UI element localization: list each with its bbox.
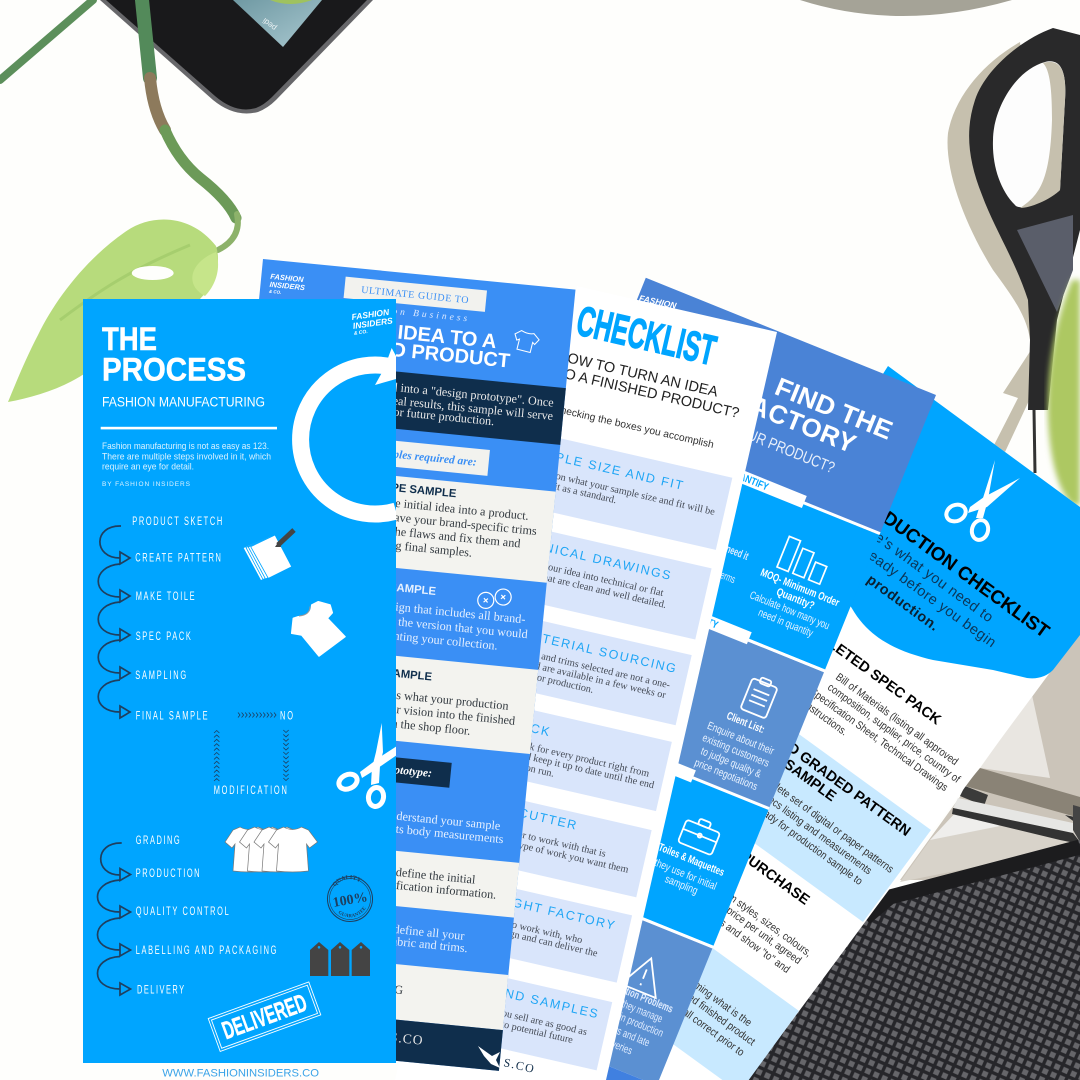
item: right factory (416, 875, 617, 962)
item: tech pack: of production run. (481, 753, 555, 780)
panel: production sample: The sample is what your production (333, 682, 509, 713)
panel: client list: Enquire about their (705, 720, 776, 758)
icon: circular arrow (301, 348, 396, 514)
photo: dark mesh bag (748, 840, 1080, 1080)
item: material sourcing: for production. (533, 672, 595, 696)
item: pattern cutter: experienced in the type of work you want them (440, 822, 630, 876)
heading: find the right factory: FIND THE (771, 371, 897, 446)
photo: blurred leaf at right (1048, 280, 1080, 505)
item: sample size and fit: use it as a standard. (538, 478, 617, 506)
page 5 pale blue strip two (410, 772, 799, 1080)
icon: delivered stamp: DELIVERED (218, 989, 311, 1045)
photo: phone (100, 0, 373, 114)
page: production checklist (410, 366, 1080, 1080)
panel: quantify: Calculate how many you (748, 589, 831, 632)
panel: production problems: problems in production (584, 998, 665, 1040)
checklist footer url: S.CO (502, 1055, 537, 1076)
bulk purchase: terms and show "to" and (702, 906, 792, 976)
photo: beige stand (900, 630, 1080, 882)
lower panel: production problems background (367, 831, 712, 1080)
production checklist heading: PRODUCTION CHECKLIST (845, 483, 1053, 643)
step labels: sampling stage: SAMPLING (135, 669, 186, 683)
curved arrows: production stage (98, 843, 130, 995)
samples required label: The samples required are: (352, 445, 477, 469)
item: technical drawings: sketches that are clean and well detailed. (503, 563, 667, 611)
panel: quantify: QUANTIFY (726, 466, 771, 494)
icon: white sparkle (478, 1046, 500, 1068)
item: tech pack: the start and keep it up to date until the end (481, 741, 655, 791)
icon: paper stack with pencil (244, 530, 294, 580)
item: send samples: Make sure the samples you sell are as good as (403, 985, 588, 1038)
panel: grading: GRADING (347, 978, 404, 997)
title: FINISHED PRODUCT (312, 331, 511, 373)
item: sample size and fit: Decide on what your sample size and fit will be (524, 464, 716, 518)
panel: client list: QUALITY (681, 607, 720, 632)
instruction: Start by checking the boxes you accomplish (517, 396, 715, 451)
logo: FASHION (351, 307, 391, 322)
panel: define prototype label (268, 746, 511, 846)
panel: client list (479, 546, 828, 808)
step labels: production stage: DELIVERY (137, 984, 184, 997)
small logo: FASHION (638, 293, 678, 311)
ultimate guide label (344, 277, 487, 312)
step labels: sampling stage: CREATE PATTERN (135, 552, 221, 565)
completed spec pack: Bill of Materials (listing all approved (833, 672, 960, 768)
photo: black scissors handle (948, 28, 1080, 473)
title (102, 321, 246, 388)
panel: prototype sample: Turning the initial idea into a product. (344, 491, 529, 523)
step labels: production stage: GRADING (136, 834, 180, 848)
approved sample copy: approved finished product (662, 975, 757, 1049)
logo: INSIDERS (352, 315, 394, 331)
item: tech pack (456, 706, 662, 802)
approved sample copy: is all correct prior to (672, 1001, 746, 1059)
item: sample size and fit (517, 443, 721, 528)
completed spec pack: Specification Sheet, Technical Drawings (807, 686, 950, 794)
byline: BY FASHION INSIDERS (102, 481, 191, 488)
step labels: sampling stage: SPEC PACK (136, 630, 191, 644)
panel: fabric and trims: fabric and trims. (387, 933, 468, 955)
photo: green leaf (8, 220, 218, 402)
step labels: sampling stage: FINAL SAMPLE (136, 710, 208, 723)
panel: final sample (316, 571, 532, 656)
panel: final sample: use for presenting your collection. (331, 622, 498, 653)
photo: metal pen (952, 768, 1080, 844)
icon: bars (777, 536, 832, 584)
icon: white scissors (336, 723, 397, 808)
intro copy: Here's what you need to (851, 515, 996, 626)
final graded pattern: A complete set of digital or paper patterns (747, 764, 895, 876)
icon: warning triangle (621, 951, 669, 998)
step labels: sampling stage: PRODUCT SKETCH (132, 515, 222, 529)
panel: prototype sample: before making final samples. (331, 532, 473, 560)
panel: quantify: Quantity? (774, 586, 816, 612)
item: pattern cutter: Find a pattern maker to work with that is (442, 812, 607, 860)
final graded pattern: Ready for production sample to (751, 801, 865, 888)
icon: quality stamp: 100% (332, 890, 369, 911)
item: right factory: FIND THE RIGHT FACTORY (423, 875, 617, 933)
item: right factory: Find a factory to work with, who (450, 905, 583, 946)
dark intro band: Your idea is turned into a "design prototype". Once (305, 371, 554, 410)
panel: production sample: product on the shop floor. (345, 712, 471, 738)
panel: final sample: The final design that includes all brand- (331, 593, 526, 626)
panel: prototype sample: It may not have your brand-specific trims (335, 504, 538, 538)
bulk purchase: BULK PURCHASE (701, 822, 812, 909)
samples required label (304, 432, 490, 476)
panel: define prototype label: Steps to a prototype: (336, 759, 433, 780)
heading: find the right factory: RIGHT FACTORY (647, 350, 861, 459)
icon: t-shirt (292, 602, 345, 656)
icon: clothing tags (310, 942, 370, 976)
intro paragraph (102, 441, 271, 472)
subtitle: Fashion Business (354, 303, 471, 324)
item: right factory: understands your design and can deliver the (422, 909, 599, 960)
ultimate guide label: ULTIMATE GUIDE TO (361, 285, 470, 306)
bulk purchase (663, 822, 839, 981)
approved sample copy (653, 964, 765, 1061)
intro paragraph: There are multiple steps involved in it, which (102, 451, 271, 462)
title: CHECKLIST (572, 297, 721, 374)
panel: quantify: MOQ- Minimum Order (759, 567, 841, 610)
panel: production sample (217, 639, 538, 754)
panel: quantify: Lead Time you need it (676, 524, 750, 563)
subtitle: FASHION MANUFACTURING (102, 394, 265, 409)
panel: fabric and trims (339, 917, 470, 955)
item: technical drawings (497, 531, 674, 611)
title: FROM IDEA TO A (333, 315, 498, 353)
logo (351, 306, 394, 337)
icon: white scissors (944, 460, 1020, 542)
dark intro band: as a base for future production. (343, 400, 495, 428)
modification loop (214, 710, 293, 798)
logo: FASHION (270, 272, 305, 284)
item: send samples (400, 964, 601, 1051)
panel: final sample: specific trims is the version that you would (318, 607, 528, 641)
dark intro band: you get ideal results, this sample will serve (344, 389, 554, 423)
logo: & CO. (269, 289, 282, 295)
bulk purchase: unit price per unit, agreed (709, 894, 803, 967)
panel: production problems (373, 828, 713, 1071)
item: material sourcing: Ensure fabrics and trims selected are not a one- (481, 637, 672, 691)
page 5 white sheet (497, 366, 1080, 1080)
panel: client list: existing customers (701, 732, 771, 770)
icon: clipboard (740, 674, 779, 719)
step labels: production stage: QUALITY CONTROL (136, 905, 229, 919)
item: technical drawings: Turn your idea into technical or flat (521, 556, 665, 599)
blue sheet (186, 259, 576, 1071)
item: send samples: what you show to potential future (438, 1005, 574, 1046)
panel: production problems: deliveries (598, 1034, 634, 1058)
item: material sourcing: MATERIAL SOURCING (520, 627, 679, 676)
panel: production problems: delays and late (598, 1018, 651, 1049)
item: technical drawings: TECHNICAL DRAWINGS (504, 531, 673, 583)
dark intro band (248, 358, 566, 445)
item: tech pack: Create a tech pack for every product right from (460, 726, 650, 780)
photo: stone bowl (800, 0, 1012, 16)
item: pattern cutter (440, 789, 637, 876)
panel: final sample: FINAL SAMPLE (352, 578, 437, 598)
curved arrows: sampling stage (98, 526, 130, 718)
modification loop: MODIFICATION (214, 784, 287, 798)
photo: plant stems (0, 0, 238, 250)
panel: client list: Client List: (725, 710, 766, 736)
panel: production sample: PRODUCTION SAMPLE (306, 659, 433, 684)
title (312, 313, 513, 373)
panel: client list: price negotiations (693, 757, 760, 793)
subtitle question: INTO A FINISHED PRODUCT? (540, 361, 741, 422)
item: tech pack: TECH PACK (466, 707, 552, 739)
panel: fabric and trims: Helps you define all your (340, 917, 465, 943)
website url: WWW.FASHIONINSIDERS.CO (162, 1068, 319, 1080)
panel: toiles and maquettes: sampling (663, 873, 699, 897)
chevrons: loop arrows (214, 712, 289, 781)
final graded pattern (691, 701, 920, 898)
panel: client list: to judge quality & (699, 745, 763, 781)
completed spec pack: COMPLETED SPEC PACK (790, 611, 944, 729)
item: material sourcing (476, 619, 679, 713)
final graded pattern: FINAL AND GRADED PATTERN (730, 701, 913, 840)
page 5 pale blue strip one (600, 639, 931, 922)
item: pattern cutter: PATTERN CUTTER (446, 789, 579, 833)
icon: quality stamp (326, 875, 373, 922)
logo: & CO. (354, 329, 368, 337)
panel: production problems: Production Problems (600, 976, 675, 1016)
subtitle question: HOW TO TURN AN IDEA (556, 348, 720, 401)
checklist boxes (408, 434, 732, 1070)
panel: specification: Helps you define the initial (343, 860, 477, 887)
item: send samples: SEND SAMPLES (484, 982, 601, 1021)
subheading: FOR YOUR PRODUCT? (700, 408, 837, 478)
photo: phone: pedi (261, 16, 278, 33)
intro paragraph: Fashion manufacturing is not as easy as 123. (102, 441, 269, 452)
icon: small outlined t-shirt (512, 329, 540, 354)
bulk purchase: Confirm styles, sizes, colours, (705, 877, 813, 960)
page: find the factory (367, 278, 936, 1080)
icon: buttons (477, 587, 512, 611)
completed spec pack: Construction Instructions. (756, 666, 849, 739)
step labels: production stage: LABELLING AND PACKAGING (136, 944, 277, 958)
step labels: production stage (136, 834, 277, 997)
panel: prototype sample: PROTOTYPE SAMPLE (337, 477, 457, 500)
icon: quality stamp: QUALITY (332, 875, 362, 886)
panel: quantify: need in quantity (756, 607, 815, 640)
icon: row of t-shirts (225, 827, 318, 872)
panel: specification: specification information. (370, 876, 497, 902)
item: material sourcing: off and are available in a few weeks or (511, 655, 667, 701)
panel: specification (201, 832, 519, 918)
lower panel: next section background (480, 1026, 643, 1080)
panel: quantify (535, 409, 883, 669)
page: ultimate guide (186, 259, 576, 1071)
icon: quality stamp: GUARANTEE (338, 906, 366, 918)
final graded pattern: SET AND SAMPLE (726, 717, 839, 805)
item: sample size and fit: SAMPLE SIZE AND FIT (523, 443, 686, 493)
step labels: sampling stage (132, 515, 222, 723)
logo: INSIDERS (269, 280, 305, 292)
step labels: sampling stage: MAKE TOILE (136, 590, 195, 604)
intro paragraph: require an eye for detail. (102, 461, 194, 472)
panel: define prototype label: size and its body measurements (349, 817, 504, 846)
white sheet (395, 286, 777, 1080)
blue card (83, 299, 396, 1063)
intro copy: production. (863, 572, 942, 635)
header panel (590, 278, 936, 533)
panel: toiles and maquettes: they use for initial (653, 857, 718, 893)
approved sample copy: Confirming what is the (671, 965, 754, 1030)
panel: prototype sample: but it shows the flaws and fix them and (329, 518, 521, 550)
panel: grading (190, 944, 508, 1030)
panel: toiles and maquettes (423, 684, 772, 946)
heading: find the right factory (647, 325, 897, 470)
page 5 text (543, 483, 1065, 1067)
completed spec pack: composition, supplier, price, country of (825, 682, 962, 786)
panel: production problems: How they manage (604, 992, 664, 1025)
title: PROCESS (102, 352, 246, 388)
page 5 cyan wave header (790, 366, 1080, 678)
panel: quantify: payment terms (691, 558, 737, 586)
completed spec pack (753, 611, 985, 809)
step labels: production stage: PRODUCTION (136, 867, 200, 881)
intro copy: get ready before you begin (840, 529, 999, 651)
footer band (186, 999, 503, 1071)
page: checklist (376, 286, 777, 1080)
title: THE (102, 321, 157, 357)
page: the process (83, 299, 396, 1063)
footer band: WWW.FASHIONINSIDERS.CO (221, 1013, 424, 1048)
icon: briefcase (678, 814, 722, 855)
intro copy (828, 514, 1010, 668)
icon: delivered stamp (208, 982, 321, 1051)
panel: define prototype label: Helps you understand your sample (331, 802, 501, 833)
panel: prototype sample (234, 461, 556, 583)
panel: toiles and maquettes: Toiles & Maquettes (657, 842, 726, 879)
final graded pattern: Size specs listing and measurements (741, 776, 874, 877)
logo (269, 272, 306, 297)
modification loop: NO (280, 710, 293, 723)
panel: production sample: will turn your vision into the finished (333, 696, 516, 728)
